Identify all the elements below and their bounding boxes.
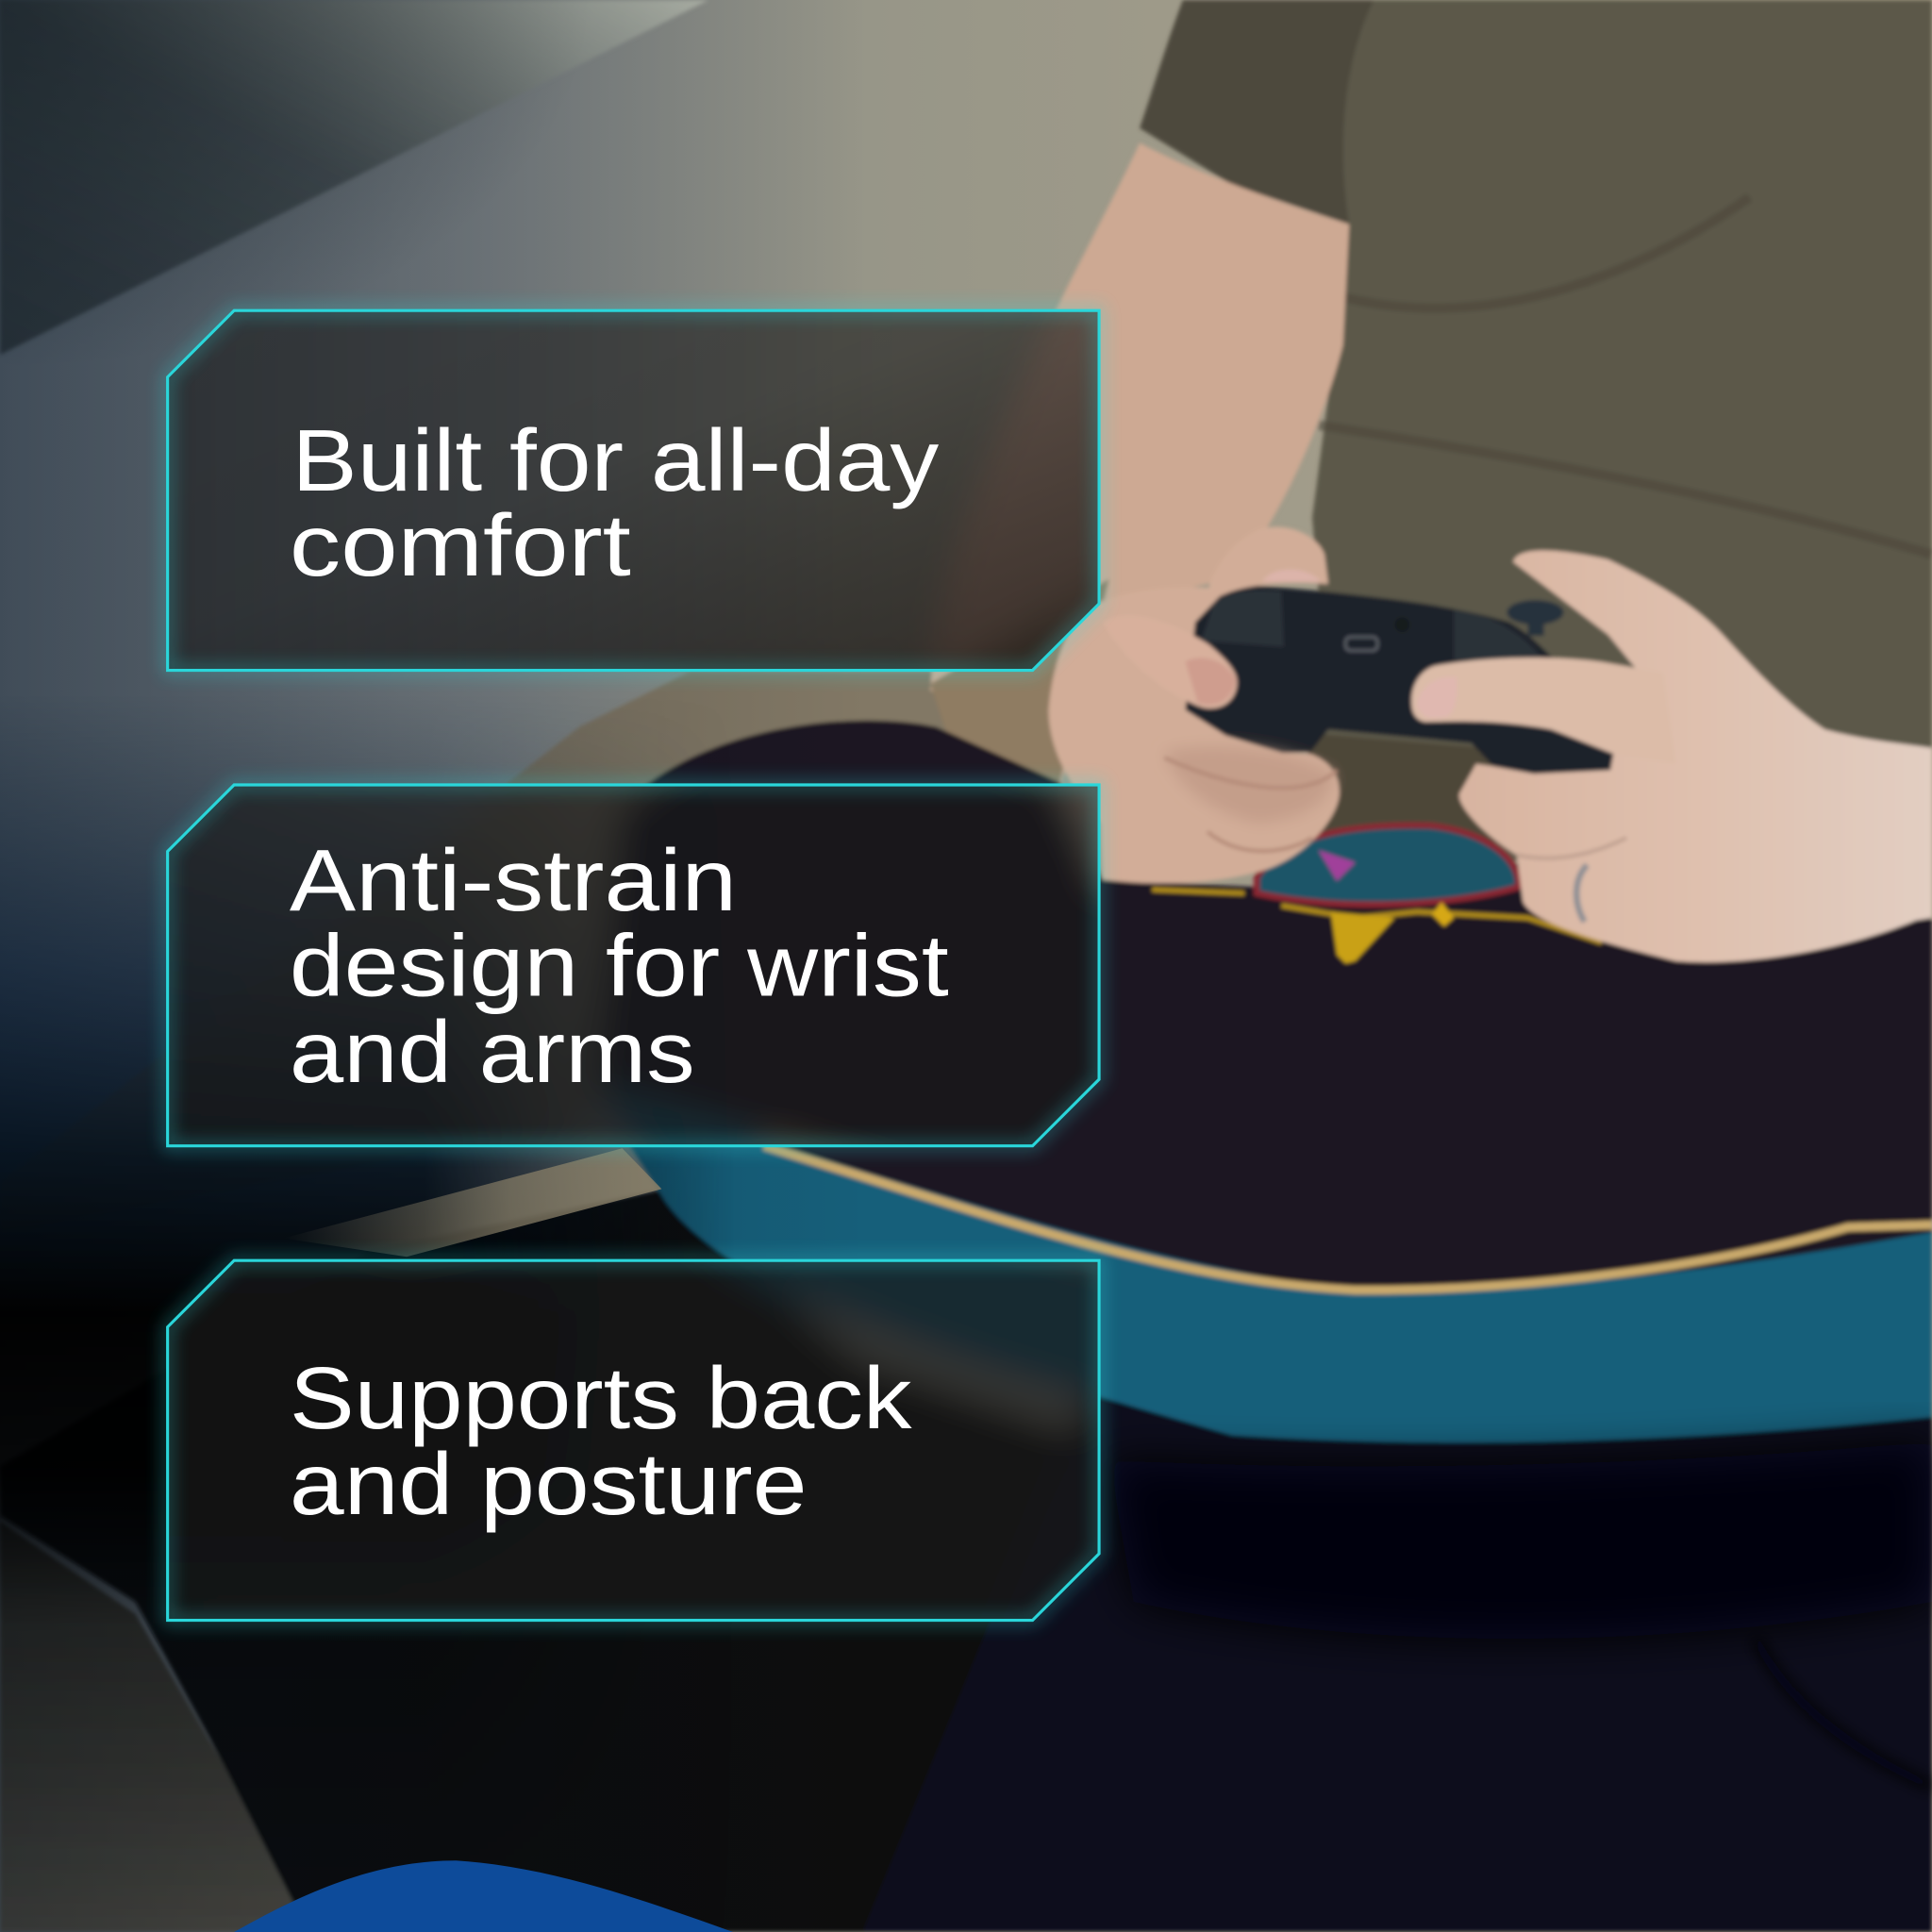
right hand	[1459, 550, 1932, 962]
controller stick	[1507, 600, 1563, 625]
controller	[1185, 584, 1614, 774]
dark cushion shadow	[0, 1189, 1932, 1932]
sleeve	[1140, 0, 1374, 225]
panel text: Supports back	[290, 1349, 912, 1447]
right thumb nail	[1417, 677, 1457, 718]
panel text: and arms	[290, 1003, 695, 1101]
panel text: Anti-strain	[290, 831, 737, 929]
tan sofa seat	[0, 672, 986, 1232]
trouser fold	[1756, 1639, 1932, 1787]
wedding ring	[1576, 865, 1587, 922]
left thumb	[1103, 616, 1237, 708]
panel text: and posture	[290, 1435, 808, 1533]
controller button	[1395, 617, 1409, 632]
right thumb	[1411, 658, 1675, 764]
panel text	[290, 831, 949, 1101]
panel text	[290, 1349, 912, 1533]
panel: all-day comfort	[157, 296, 1111, 682]
blue blanket	[234, 1860, 733, 1932]
lower-left sofa fabric	[0, 1522, 308, 1932]
teal pillow band	[591, 1084, 1932, 1447]
shirt lower shade	[1306, 733, 1528, 850]
left hand	[1049, 526, 1340, 883]
panel text: Built for all-day	[292, 411, 940, 509]
trousers knee and pillow	[591, 721, 1932, 1291]
finger crease	[1517, 838, 1626, 858]
forearm hair shade	[930, 579, 1109, 782]
controller port	[1345, 637, 1377, 651]
left finger creases	[1164, 758, 1337, 851]
panel text	[290, 411, 940, 594]
upper arm	[930, 143, 1349, 789]
controller top ridge	[1201, 591, 1546, 665]
tan sofa front strip	[283, 1148, 661, 1257]
top-left dark corner	[0, 0, 986, 616]
gold piping	[764, 1146, 1932, 1291]
wall behind the sofa	[0, 0, 708, 355]
embroidery	[1257, 825, 1518, 905]
panel: back and posture	[153, 1246, 1113, 1634]
panel text: design for wrist	[290, 916, 949, 1014]
panel text: comfort	[290, 496, 631, 594]
left finger shading	[1164, 747, 1333, 823]
dark band in trousers	[1109, 1441, 1932, 1639]
left thumb nail	[1185, 658, 1236, 705]
lower left fade to black	[0, 735, 709, 1830]
shirt folds	[1319, 197, 1932, 555]
t-shirt	[1140, 0, 1932, 862]
trousers lower	[862, 1392, 1932, 1932]
top fingernail	[1263, 570, 1321, 581]
panel: anti-strain design	[154, 771, 1113, 1160]
